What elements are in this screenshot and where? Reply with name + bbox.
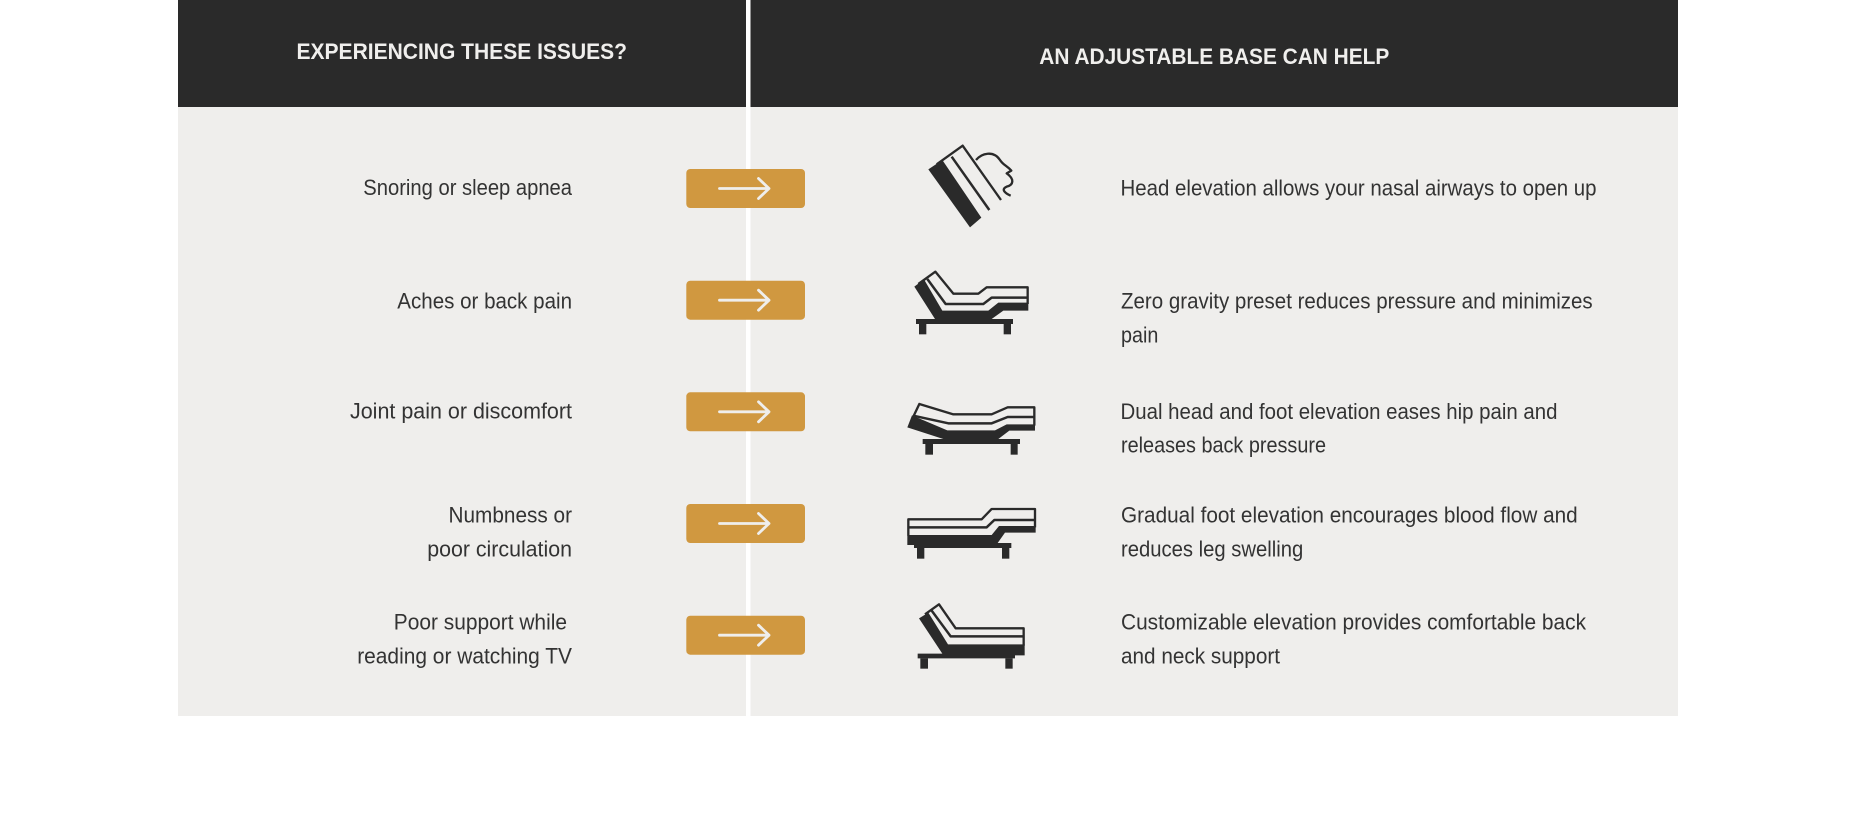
issue text: poor support: Poor support while — [394, 609, 567, 634]
icon: zero gravity bed — [914, 272, 1028, 334]
issue text: numbness: poor circulation — [427, 537, 572, 562]
solution text: customizable elevation: Customizable elevation provides comfortable back — [1121, 609, 1587, 634]
icon: head elevation with face — [928, 146, 1012, 227]
icon: dual head and foot elevation bed — [907, 404, 1035, 455]
header: left column bar — [178, 0, 746, 107]
issue text: aches: Aches or back pain — [397, 288, 572, 313]
issue text: numbness: Numbness or — [448, 502, 572, 527]
icon: foot elevation bed — [907, 509, 1036, 559]
solution text: customizable elevation — [1121, 609, 1587, 668]
issue text: poor support — [357, 609, 572, 668]
arrow button row 1 — [686, 169, 805, 208]
solution text: customizable elevation: and neck support — [1121, 643, 1280, 668]
solution text: dual elevation — [1120, 399, 1558, 457]
arrow button row 5 — [686, 616, 805, 655]
header: right column bar — [750, 0, 1678, 107]
solution text: foot elevation: Gradual foot elevation encourages blood flow and — [1121, 502, 1578, 527]
solution text: zero gravity — [1121, 288, 1593, 347]
solution text: foot elevation — [1121, 502, 1578, 562]
panel: table background — [178, 107, 1678, 716]
white column divider — [746, 0, 750, 716]
solution text: zero gravity: pain — [1121, 322, 1158, 347]
arrow button row 4 — [686, 504, 805, 543]
arrow button row 2 — [686, 281, 805, 320]
solution text: dual elevation: releases back pressure — [1121, 432, 1326, 457]
solution text: head elevation: Head elevation allows your nasal airways to open up — [1120, 176, 1596, 201]
issue text: numbness — [427, 502, 572, 562]
solution text: dual elevation: Dual head and foot elevation eases hip pain and — [1120, 399, 1558, 424]
solution text: zero gravity: Zero gravity preset reduces pressure and minimizes — [1121, 288, 1593, 313]
icon: head elevation bed — [918, 604, 1025, 669]
issue text: snoring: Snoring or sleep apnea — [363, 175, 573, 200]
issue text: joint pain: Joint pain or discomfort — [350, 398, 572, 424]
header: right column bar: AN ADJUSTABLE BASE CAN HELP — [1039, 44, 1389, 69]
arrow button row 3 — [686, 392, 805, 431]
header: left column bar: EXPERIENCING THESE ISSUES? — [296, 39, 627, 64]
solution text: foot elevation: reduces leg swelling — [1121, 537, 1303, 562]
issue text: poor support: reading or watching TV — [357, 643, 572, 668]
